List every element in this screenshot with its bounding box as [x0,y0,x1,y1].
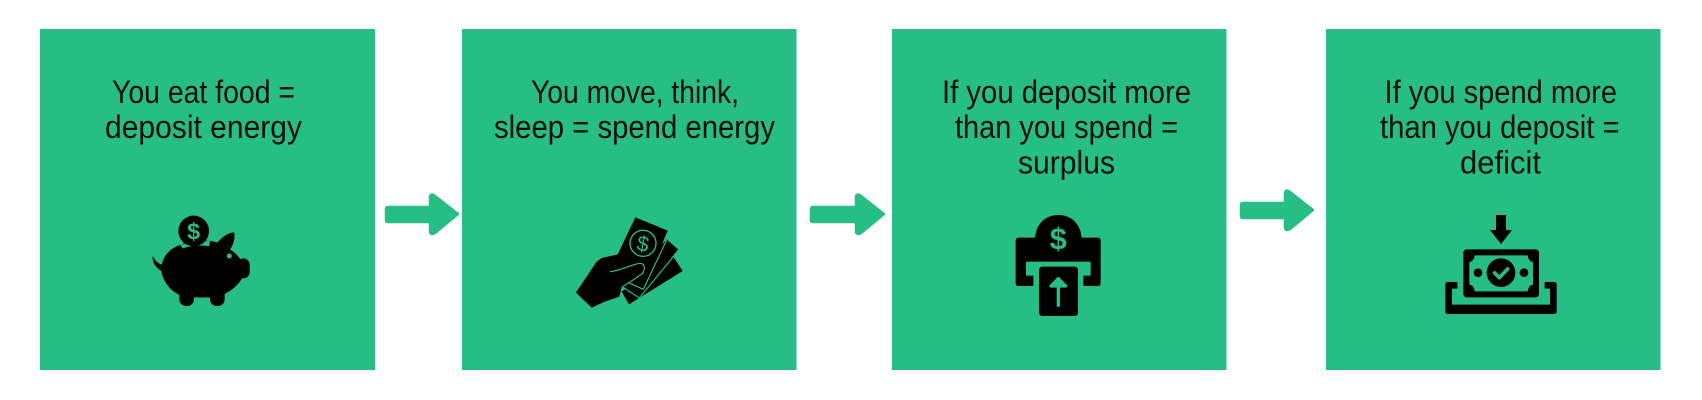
arrow: panel 1 to panel 2 [386,195,458,234]
panel: deficit [1326,29,1660,370]
arrow: panel 3 to panel 4 [1241,191,1313,230]
icon: piggy bank: $ [187,218,200,244]
heading: if you deposit more [942,74,1191,180]
heading: if you deposit more: than you spend = [955,109,1178,145]
icon: hand holding banknotes [576,217,683,308]
heading: you eat food: deposit energy [105,109,302,145]
panel: spend energy [462,29,796,370]
arrow: panel 2 to panel 3 [811,195,884,234]
heading: you eat food: You eat food = [112,74,295,110]
heading: if you spend more [1380,74,1620,180]
heading: if you spend more: If you spend more [1384,74,1617,110]
heading: if you spend more: deficit [1460,144,1541,180]
heading: if you deposit more: surplus [1018,144,1115,180]
heading: you move think sleep: sleep = spend energy [494,109,775,145]
heading: you eat food [105,74,302,145]
heading: you move think sleep [494,74,775,145]
icon: hand holding banknotes: $ [635,231,651,257]
icon: banknote into tray [1445,215,1557,314]
heading: you move think sleep: You move, think, [531,74,739,110]
icon: cash machine with dollar: $ [1050,222,1067,256]
icon: cash machine with dollar [1016,215,1101,316]
heading: if you spend more: than you deposit = [1380,109,1620,145]
panel: deposit energy [40,29,375,370]
icon: piggy bank [153,216,250,306]
panel: surplus [892,29,1226,370]
heading: if you deposit more: If you deposit more [942,74,1191,110]
